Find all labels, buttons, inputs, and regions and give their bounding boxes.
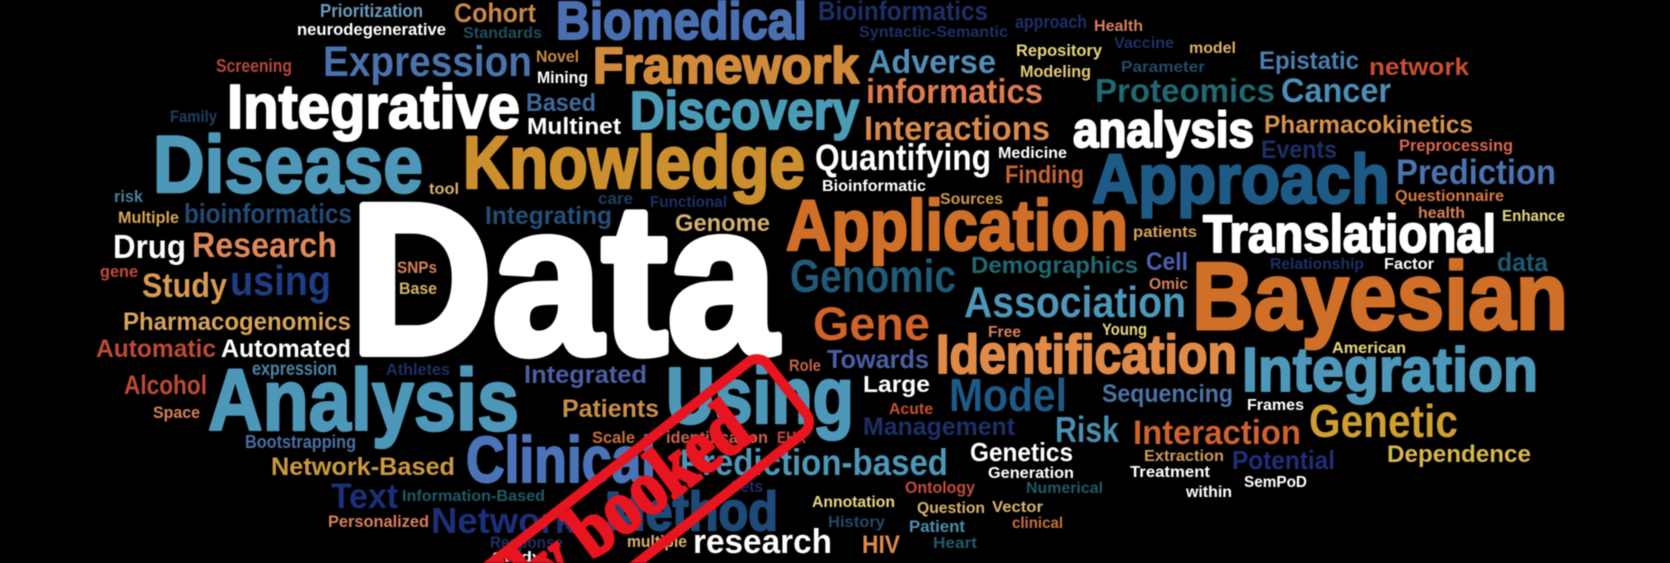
word: within: within bbox=[1185, 484, 1232, 501]
word: tool: tool bbox=[429, 181, 459, 198]
stamp: fully booked bbox=[318, 354, 815, 563]
word: Demographics: Demographics bbox=[971, 252, 1138, 278]
word: Family: Family bbox=[170, 107, 217, 126]
word: Parameter: Parameter bbox=[1121, 59, 1205, 76]
word: Research: Research bbox=[192, 226, 337, 265]
word: Patient: Patient bbox=[909, 517, 965, 536]
word: Personalized: Personalized bbox=[328, 512, 429, 531]
word: data: data bbox=[1497, 247, 1549, 277]
word: Towards: Towards bbox=[827, 344, 929, 374]
word: Heart: Heart bbox=[933, 535, 978, 552]
word: History: History bbox=[828, 514, 885, 531]
word: network: network bbox=[1369, 54, 1470, 81]
word: Acute: Acute bbox=[889, 401, 933, 418]
word: Response: Response bbox=[490, 533, 563, 552]
word: Events: Events bbox=[1261, 136, 1337, 164]
word: Alcohol: Alcohol bbox=[124, 370, 207, 400]
word: Standards: Standards bbox=[463, 25, 542, 42]
word: Prediction-based: Prediction-based bbox=[680, 442, 948, 483]
word: Omic: Omic bbox=[1149, 276, 1188, 293]
word: Questionnaire: Questionnaire bbox=[1395, 188, 1504, 205]
word: Free: Free bbox=[988, 324, 1021, 341]
word: EHR: EHR bbox=[777, 428, 806, 447]
word: Mining: Mining bbox=[537, 68, 588, 87]
word: Model: Model bbox=[949, 369, 1067, 421]
word: Sets: Sets bbox=[730, 477, 763, 496]
word: Vector: Vector bbox=[992, 499, 1043, 516]
word: Treatment: Treatment bbox=[1130, 464, 1211, 481]
word: Genetic: Genetic bbox=[1309, 395, 1458, 447]
word: Bootstrapping: Bootstrapping bbox=[245, 432, 356, 452]
word: Repository: Repository bbox=[1016, 41, 1103, 60]
word: model: model bbox=[1189, 40, 1236, 57]
word: Network-Based: Network-Based bbox=[271, 453, 455, 481]
word: Framework: Framework bbox=[593, 37, 860, 94]
word: risk: risk bbox=[114, 187, 144, 206]
word: SemPoD: SemPoD bbox=[1244, 474, 1307, 491]
word: Information-Based: Information-Based bbox=[402, 488, 545, 505]
word: Health: Health bbox=[1094, 18, 1143, 35]
word: Dependence: Dependence bbox=[1387, 441, 1531, 468]
word: Identification: Identification bbox=[936, 323, 1237, 385]
word: Extraction: Extraction bbox=[1144, 448, 1224, 465]
word: informatics: informatics bbox=[866, 73, 1043, 111]
word: Finding: Finding bbox=[1005, 161, 1084, 189]
word: Analysis: Analysis bbox=[208, 352, 519, 449]
word: Athletes: Athletes bbox=[386, 360, 450, 379]
word: Translational: Translational bbox=[1203, 205, 1496, 264]
word: Method: Method bbox=[605, 480, 778, 542]
word: Quantifying: Quantifying bbox=[815, 137, 991, 178]
word: Association: Association bbox=[964, 278, 1186, 327]
word: Vaccine: Vaccine bbox=[1114, 35, 1174, 52]
word: health: health bbox=[1418, 205, 1465, 222]
word: SNPs: SNPs bbox=[397, 258, 437, 277]
word: Syntactic-Semantic: Syntactic-Semantic bbox=[859, 24, 1008, 41]
word: Pharmacogenomics: Pharmacogenomics bbox=[123, 308, 351, 336]
word: Disease: Disease bbox=[153, 120, 423, 210]
word: Role: Role bbox=[789, 356, 821, 375]
word: Relationship: Relationship bbox=[1270, 256, 1364, 273]
word: Genetics: Genetics bbox=[970, 437, 1073, 467]
word: Modeling: Modeling bbox=[1020, 62, 1091, 81]
word: Knowledge: Knowledge bbox=[463, 121, 805, 204]
word: Integration: Integration bbox=[1242, 336, 1538, 405]
word: Based: Based bbox=[526, 89, 596, 117]
word: Automated: Automated bbox=[221, 335, 351, 363]
word: Multinet: Multinet bbox=[527, 113, 621, 139]
word: neurodegenerative: neurodegenerative bbox=[297, 21, 446, 39]
word: Drug: Drug bbox=[113, 228, 186, 265]
word: Screening: Screening bbox=[216, 56, 292, 76]
word: Patients: Patients bbox=[562, 395, 659, 423]
word: Medicine: Medicine bbox=[998, 145, 1067, 162]
word: gene: gene bbox=[100, 262, 138, 281]
word: research: research bbox=[693, 523, 832, 561]
word: Bioinformatic: Bioinformatic bbox=[822, 178, 926, 195]
word: Ontology: Ontology bbox=[905, 478, 976, 497]
word: Factor: Factor bbox=[1384, 256, 1434, 273]
word: Base: Base bbox=[399, 279, 437, 298]
word: Risk: Risk bbox=[1055, 409, 1120, 450]
word: Management: Management bbox=[863, 413, 1016, 441]
word: American: American bbox=[1332, 340, 1406, 357]
word: Multiple: Multiple bbox=[118, 208, 179, 227]
word: Gene: Gene bbox=[813, 297, 930, 350]
word: analysis: analysis bbox=[1073, 102, 1254, 158]
word: multiple: multiple bbox=[627, 532, 687, 551]
word: Integrated: Integrated bbox=[524, 361, 647, 389]
word: Prioritization: Prioritization bbox=[320, 1, 423, 21]
word: Interactions: Interactions bbox=[864, 110, 1050, 148]
word: Novel: Novel bbox=[536, 47, 579, 66]
word: identification: identification bbox=[666, 428, 768, 447]
word: Interaction: Interaction bbox=[1133, 414, 1301, 452]
word: Study: Study bbox=[142, 267, 227, 305]
word: Text: Text bbox=[331, 477, 398, 516]
word: Integrating: Integrating bbox=[485, 202, 612, 230]
word: Cell: Cell bbox=[1146, 248, 1188, 276]
word: Sources: Sources bbox=[940, 191, 1003, 208]
word: Clinical: Clinical bbox=[466, 423, 656, 496]
word: Adverse: Adverse bbox=[868, 43, 996, 80]
word: expression: expression bbox=[252, 359, 337, 380]
word: Annotation: Annotation bbox=[812, 494, 895, 511]
word: Young: Young bbox=[1102, 320, 1147, 339]
word: Discovery: Discovery bbox=[630, 81, 859, 141]
word: using: using bbox=[230, 257, 331, 304]
word: Generation: Generation bbox=[988, 465, 1074, 482]
word: Bayesian: Bayesian bbox=[1192, 243, 1568, 350]
word: Using: Using bbox=[666, 351, 854, 440]
word: Automatic: Automatic bbox=[96, 335, 216, 363]
stamp border bbox=[318, 354, 815, 563]
word: Epistatic: Epistatic bbox=[1259, 47, 1359, 75]
word: Frames: Frames bbox=[1247, 397, 1304, 414]
word: Sequencing: Sequencing bbox=[1102, 380, 1233, 408]
word: Genomic: Genomic bbox=[790, 250, 956, 302]
word: Functional: Functional bbox=[650, 194, 727, 211]
word: bioinformatics: bioinformatics bbox=[184, 198, 352, 229]
central word: Data: Data bbox=[350, 160, 779, 399]
word: Question: Question bbox=[917, 500, 985, 517]
word: Application: Application bbox=[786, 187, 1128, 266]
word: Large: Large bbox=[863, 371, 930, 397]
word: Network: Network bbox=[431, 500, 576, 541]
word: HIV: HIV bbox=[862, 531, 900, 559]
word: Potential: Potential bbox=[1232, 445, 1335, 475]
word: clinical: clinical bbox=[1012, 515, 1063, 532]
word: Cancer: Cancer bbox=[1281, 72, 1391, 110]
word: Enhance: Enhance bbox=[1502, 208, 1565, 225]
word: Prediction: Prediction bbox=[1396, 153, 1556, 192]
word: Expression: Expression bbox=[323, 38, 532, 86]
word: Approach: Approach bbox=[1092, 140, 1390, 218]
word: patients: patients bbox=[1133, 224, 1197, 241]
word: Integrative: Integrative bbox=[227, 73, 520, 142]
word: approach: approach bbox=[1015, 12, 1087, 32]
word: care: care bbox=[598, 189, 633, 208]
word: Numerical: Numerical bbox=[1026, 480, 1103, 497]
word: Space: Space bbox=[153, 403, 200, 422]
word: Proteomics: Proteomics bbox=[1095, 72, 1275, 109]
word: Scale: Scale bbox=[592, 428, 635, 447]
word: Genome: Genome bbox=[675, 210, 770, 237]
word: Preprocessing: Preprocessing bbox=[1399, 136, 1513, 155]
word: Pharmacokinetics: Pharmacokinetics bbox=[1264, 111, 1473, 139]
